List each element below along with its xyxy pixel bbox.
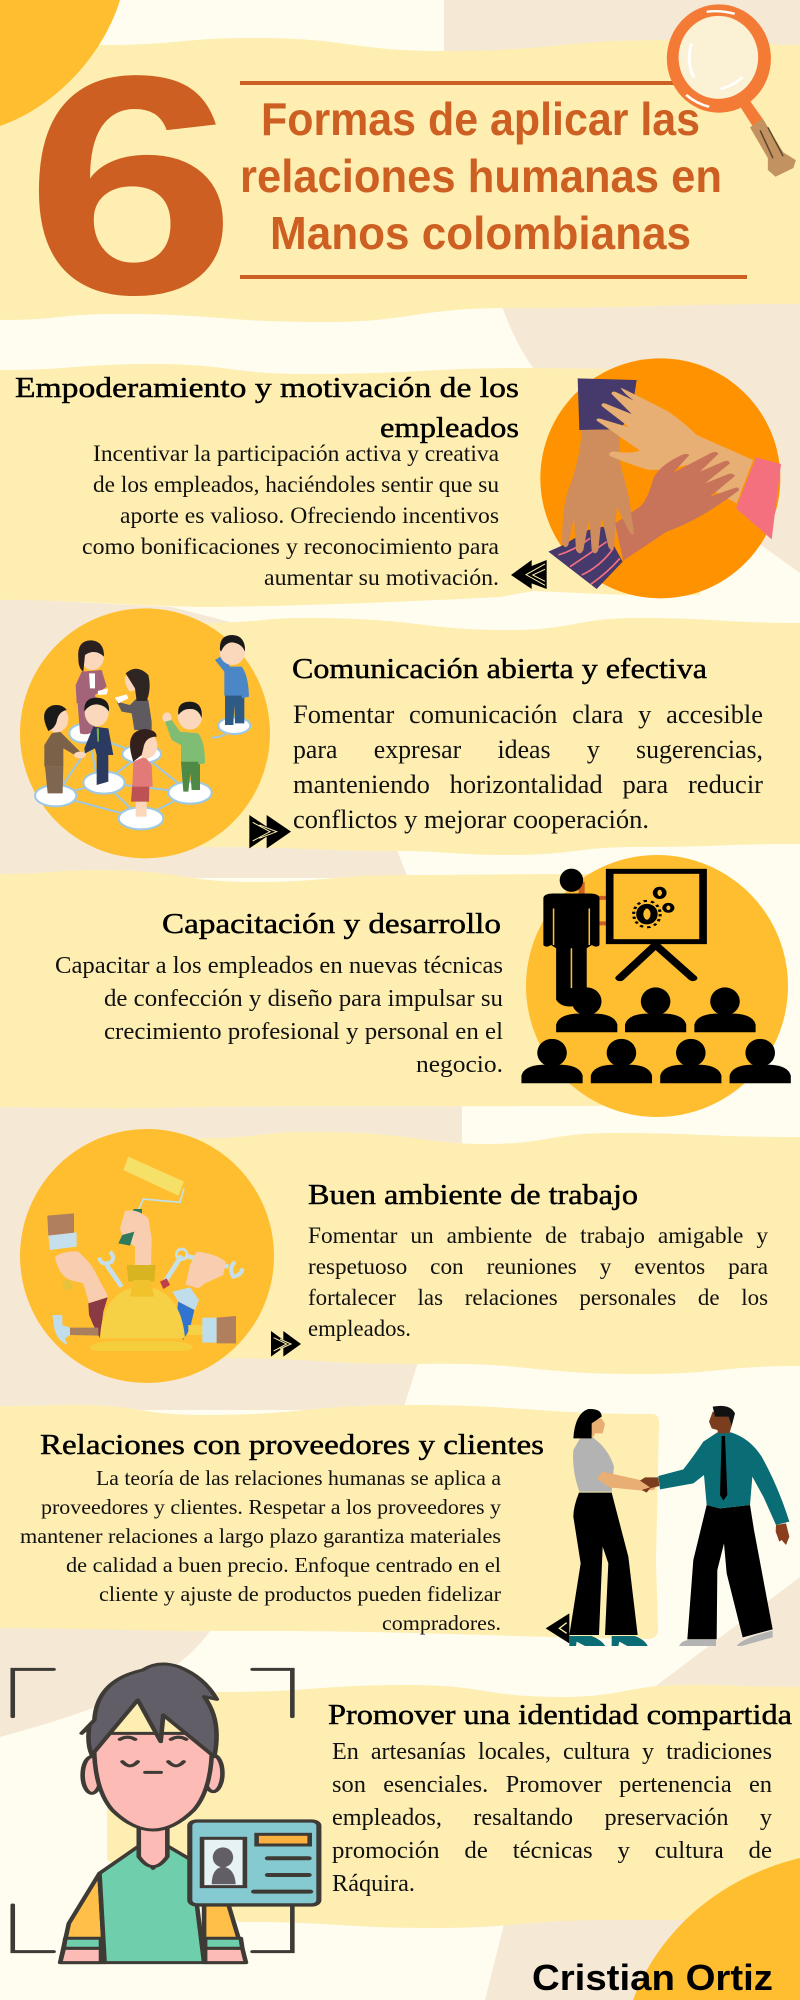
body text: compradores. [382, 1611, 501, 1635]
body text: manteniendo horizontalidad para reducir [293, 770, 763, 799]
body text: Incentivar la participación activa y creativa [93, 441, 499, 466]
person: woman in burgundy [76, 640, 108, 734]
person: woman in pink [130, 729, 157, 817]
body text: Fomentar un ambiente de trabajo amigable y [308, 1223, 768, 1248]
body text: Capacitar a los empleados en nuevas técnicas [55, 953, 503, 979]
torso and head [60, 1664, 246, 1963]
body text [55, 953, 503, 1078]
body text: son esenciales. Promover pertenencia en [332, 1772, 772, 1798]
camera brackets [13, 1669, 292, 1952]
body text: promoción de técnicas y cultura de [332, 1838, 772, 1864]
body text: fortalecer las relaciones personales de los [308, 1285, 768, 1310]
illustration: circle with tools [20, 1129, 274, 1383]
body text: de confección y diseño para impulsar su [104, 986, 503, 1012]
illustration: circle with people network [20, 608, 270, 858]
arrow: chevron left [546, 1613, 569, 1643]
illustration: circle with trainer and audience [521, 855, 791, 1117]
illustration: circle with hands [540, 358, 781, 598]
decorative sun bottom right [633, 1858, 800, 2000]
person: man in blue [215, 635, 249, 725]
person: man in green [162, 702, 205, 792]
panel: comunicacion [20, 608, 763, 858]
body text: para expresar ideas y sugerencias, [293, 735, 763, 764]
title text: relaciones humanas en [240, 150, 722, 202]
person: man in suit [84, 698, 113, 785]
body text [308, 1223, 768, 1341]
panel: proveedores [20, 1406, 789, 1646]
body text: Ráquira. [332, 1871, 415, 1897]
body text: cliente y ajuste de productos pueden fidelizar [99, 1582, 501, 1606]
body text [20, 1466, 502, 1635]
title text: Formas de aplicar las [261, 93, 700, 145]
man [640, 1406, 789, 1646]
heading [15, 373, 519, 444]
body text: La teoría de las relaciones humanas se aplica a [96, 1466, 502, 1490]
heading: Buen ambiente de trabajo [308, 1180, 638, 1211]
body text: Fomentar comunicación clara y accesible [293, 700, 763, 729]
woman [569, 1409, 657, 1646]
title text: Manos colombianas [270, 207, 691, 259]
title text [240, 93, 722, 259]
body text: aumentar su motivación. [264, 565, 499, 590]
arrow: double chevron right [271, 1331, 301, 1357]
body text: aporte es valioso. Ofreciendo incentivos [120, 503, 499, 528]
heading: Comunicación abierta y efectiva [292, 654, 708, 685]
heading: Promover una identidad compartida [328, 1700, 793, 1731]
heading: Relaciones con proveedores y clientes [40, 1430, 544, 1461]
illustration: person with id card [13, 1664, 319, 1963]
heading: Capacitación y desarrollo [162, 909, 501, 940]
body text: proveedores y clientes. Respetar a los proveedores y [41, 1495, 502, 1519]
body text: negocio. [416, 1052, 503, 1078]
arrow: double chevron left [511, 560, 547, 589]
face [120, 1737, 186, 1772]
body text: conflictos y mejorar cooperación. [293, 805, 649, 834]
body text: de calidad a buen precio. Enfoque centrado en el [66, 1553, 501, 1577]
decorative sun top left [0, 0, 120, 126]
icon: magnifying glass [667, 4, 796, 177]
person: woman in grey [115, 669, 152, 730]
body text: de los empleados, haciéndoles sentir que su [93, 472, 500, 497]
panel: identidad [13, 1664, 793, 1963]
body text: crecimiento profesional y personal en el [104, 1019, 503, 1045]
body text: mantener relaciones a largo plazo garantiza materiales [20, 1524, 501, 1548]
person: man in brown [44, 705, 86, 793]
big number 6: 6 [25, 11, 237, 359]
panel: buen ambiente [20, 1129, 768, 1383]
illustration: handshake [569, 1406, 789, 1646]
body text [82, 441, 500, 590]
heading: empleados [380, 413, 519, 444]
body text: En artesanías locales, cultura y tradiciones [332, 1739, 772, 1765]
heading: Empoderamiento y motivación de los [15, 373, 519, 404]
panel: empoderamiento [15, 358, 781, 598]
id card [190, 1821, 319, 1905]
body text: respetuoso con reuniones y eventos para [308, 1254, 768, 1279]
body text [293, 700, 763, 834]
body text: empleados, resaltando preservación y [332, 1805, 772, 1831]
author credit: Cristian Ortiz [532, 1957, 773, 1998]
panel: capacitacion [55, 855, 791, 1117]
arrow: double chevron right [249, 815, 291, 848]
title block [240, 81, 747, 279]
body text: como bonificaciones y reconocimiento para [82, 534, 499, 559]
body text [332, 1739, 772, 1897]
body text: empleados. [308, 1316, 411, 1341]
